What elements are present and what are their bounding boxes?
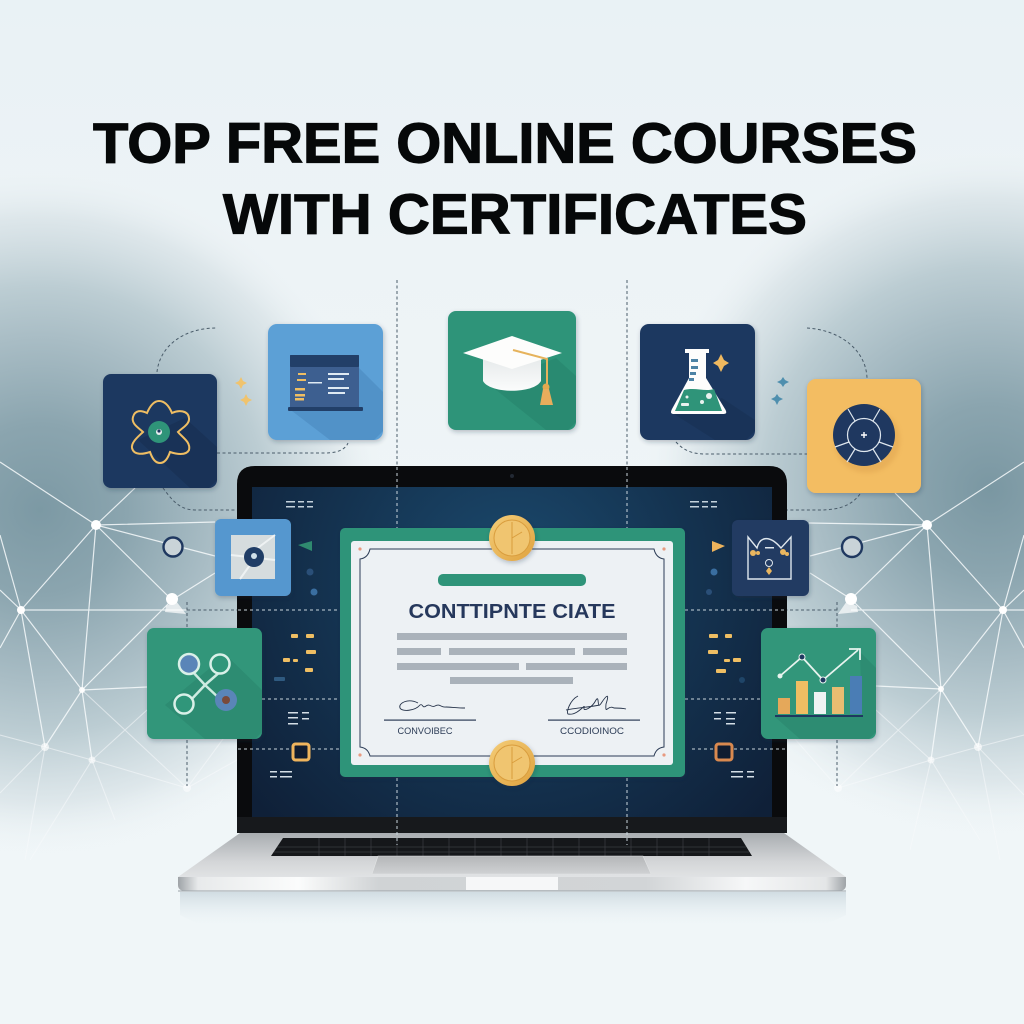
title: WITH CERTIFICATES <box>223 182 807 246</box>
certificate text lines <box>397 633 627 684</box>
seal bottom <box>489 740 535 786</box>
ring bullets <box>164 537 862 557</box>
network nodes right <box>834 520 1007 792</box>
network lines left <box>0 462 215 760</box>
sparkles right <box>771 377 789 405</box>
screen decor left <box>270 501 318 778</box>
icon: small blue tile <box>215 519 291 596</box>
network lines left lower <box>0 690 237 860</box>
signature right: CCODIOINOC <box>560 726 625 736</box>
certificate frame <box>340 528 685 777</box>
network nodes left <box>17 520 191 792</box>
laptop <box>178 466 846 925</box>
certificate banner <box>438 574 586 586</box>
seal top <box>489 515 535 561</box>
screen decor right <box>690 501 754 778</box>
icon: dial tile <box>807 379 921 493</box>
title: TOP FREE ONLINE COURSES <box>93 112 917 176</box>
title <box>93 112 917 246</box>
certificate <box>340 515 685 786</box>
screen dashed lines <box>238 467 787 845</box>
signature left <box>384 701 476 736</box>
signature left: CONVOIBEC <box>398 726 453 736</box>
icon: small navy tile <box>732 520 809 596</box>
network lines right <box>809 462 1024 760</box>
icon: network tile <box>147 628 262 739</box>
signature right <box>548 696 640 736</box>
icon: code window tile <box>268 324 383 440</box>
certificate paper <box>351 541 673 765</box>
icon: chart tile <box>761 628 876 739</box>
icon: flask tile <box>640 324 755 440</box>
trackpad <box>372 856 651 874</box>
laptop base <box>178 833 846 891</box>
laptop lid <box>237 466 787 832</box>
sparkles left <box>235 377 252 406</box>
icon: atom tile <box>103 374 217 488</box>
laptop reflection <box>180 892 846 925</box>
connectors <box>157 280 867 786</box>
icon: graduation cap tile <box>448 311 576 430</box>
certificate heading: CONTTIPNTE CIATE <box>408 600 616 623</box>
keyboard <box>271 838 752 856</box>
network lines right lower <box>787 689 1024 860</box>
